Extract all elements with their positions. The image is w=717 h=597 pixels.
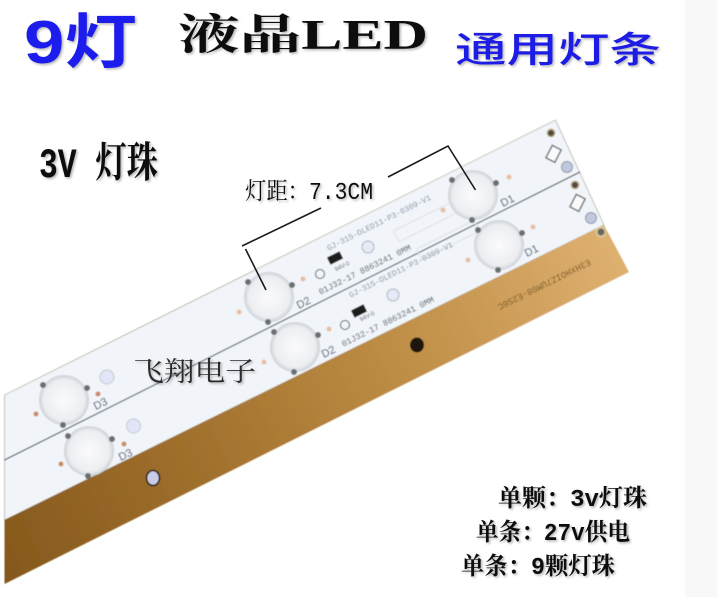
mirrored code on gold back: E3HXHOIZ7UM08-E2S6C — [495, 256, 592, 311]
title: 9 lights: 9灯 — [24, 9, 137, 76]
watermark: brand: 飞翔电子 — [133, 357, 256, 387]
strip divider line — [4, 172, 580, 460]
white strip boards — [4, 120, 604, 520]
lens D3 upper — [34, 375, 110, 428]
title: universal strip: 通用灯条 — [455, 29, 661, 70]
lens D2 upper: D2 — [295, 295, 313, 312]
lens D2 lower — [262, 322, 338, 375]
faint outline pads — [394, 202, 479, 260]
mounting holes — [100, 130, 606, 486]
LED strips photo — [4, 120, 629, 584]
title: LCD LED: 液晶LED — [178, 13, 428, 59]
lens D1 upper: D1 — [499, 193, 517, 210]
label: 3V beads: 3V 灯珠 — [39, 140, 158, 190]
board print lower: GJ-315-OLED11-P3-0309-V1 — [348, 241, 455, 300]
board print upper: GJ-315-OLED11-P3-0309-V1 — [326, 194, 433, 253]
board print upper: 01J32-17 8863241 0MM — [317, 243, 413, 297]
lens D2 upper — [236, 272, 313, 325]
lens D1 lower — [466, 220, 541, 273]
right margin strip — [685, 0, 717, 597]
connectors — [546, 145, 585, 211]
dimension bracket lines — [242, 146, 476, 290]
lens D2 lower: D2 — [320, 344, 338, 361]
board print upper: 94V-0 — [334, 261, 351, 273]
spec: single bead: 单颗：3v灯珠 — [498, 485, 647, 514]
spec: strip voltage: 单条：27v供电 — [476, 519, 630, 548]
lens D3 lower: D3 — [117, 447, 135, 464]
lens D1 upper — [440, 170, 517, 223]
board print upper — [316, 194, 433, 297]
board print lower: 01J32-17 8863241 0MM — [340, 295, 436, 349]
lens D3 lower — [58, 426, 135, 479]
board print lower — [340, 241, 455, 349]
lens D1 lower: D1 — [523, 243, 541, 260]
spec: strip bead count: 单条：9颗灯珠 — [461, 553, 615, 582]
label: bead spacing: 灯距：7.3CM — [245, 178, 373, 207]
lens D3 upper: D3 — [92, 396, 110, 413]
gold strip back — [4, 225, 629, 584]
board print lower: 94V-0 — [359, 311, 376, 323]
